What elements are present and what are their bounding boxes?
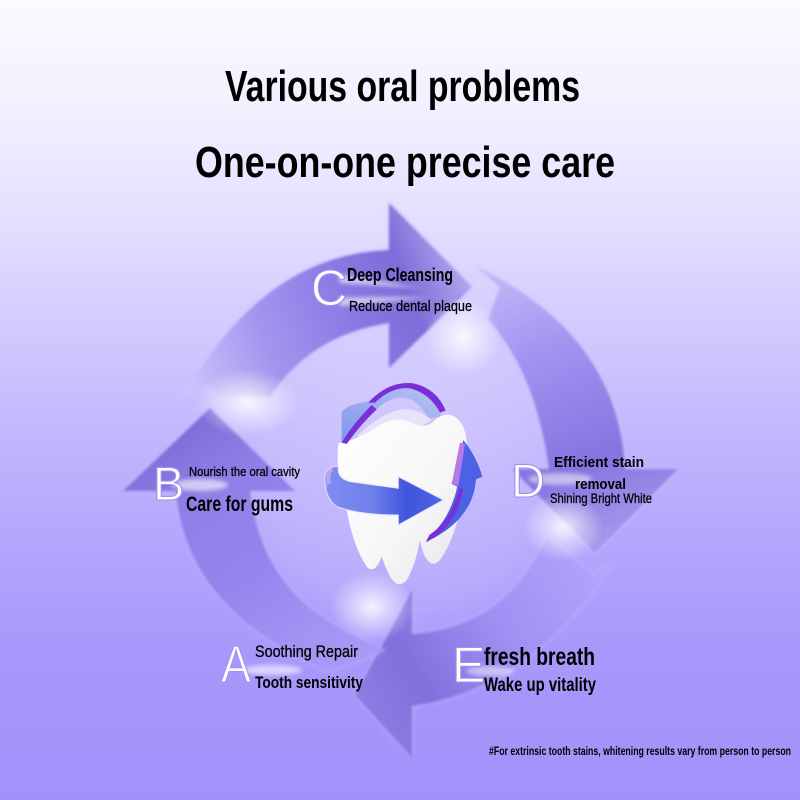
- label E: fresh breath: Wake up vitality: [484, 675, 596, 696]
- title: Various oral problems: [225, 62, 580, 111]
- cycle diagram: five arrows in a ring: [123, 203, 678, 758]
- label E: fresh breath: fresh breath: [484, 643, 595, 671]
- label A: Soothing Repair: Soothing Repair: [255, 642, 358, 661]
- icon: tooth body: [338, 415, 467, 584]
- label D: Efficient stain removal: [511, 454, 652, 507]
- title: [195, 62, 615, 187]
- icon: back of crown: [357, 409, 432, 440]
- label C: Deep Cleansing: [311, 260, 472, 316]
- label A: Soothing Repair: Tooth sensitivity: [255, 673, 363, 692]
- icon: right purple stripe: [452, 443, 465, 486]
- icon: arrow tail rim: [326, 469, 333, 488]
- label D: Efficient stain removal: removal: [575, 476, 626, 493]
- icon: right blue arrow: [426, 440, 482, 540]
- label B: Care for gums: Care for gums: [186, 493, 293, 516]
- arrow: top, C: [183, 203, 472, 398]
- icon: rear pale arrow: [342, 387, 442, 443]
- icon: rear purple band: [368, 383, 446, 413]
- label C: Deep Cleansing: C: [311, 260, 347, 316]
- title: One-on-one precise care: [195, 138, 615, 187]
- label C: Deep Cleansing: Reduce dental plaque: [349, 298, 472, 315]
- icon: front blue arrow: [325, 466, 443, 525]
- arrow: bottom right, E: [355, 537, 614, 758]
- label B: Care for gums: [153, 457, 300, 516]
- label D: Efficient stain removal: Efficient stain: [554, 454, 644, 471]
- label D: Efficient stain removal: Shining Bright White: [550, 490, 652, 506]
- icon: tooth with arrows: [325, 383, 482, 584]
- label A: Soothing Repair: [221, 636, 363, 694]
- arrow: right, D: [477, 267, 678, 553]
- label B: Care for gums: B: [153, 457, 184, 510]
- label C: Deep Cleansing: Deep Cleansing: [347, 265, 453, 285]
- label A: Soothing Repair: A: [221, 636, 251, 694]
- arrow: left, B: [123, 408, 385, 672]
- label D: Efficient stain removal: D: [511, 454, 545, 507]
- label E: fresh breath: E: [452, 637, 485, 693]
- label E: fresh breath: [452, 637, 596, 696]
- icon: front left purple stroke: [342, 405, 377, 444]
- glow highlights between arrows: [195, 297, 603, 643]
- label B: Care for gums: Nourish the oral cavity: [189, 464, 300, 479]
